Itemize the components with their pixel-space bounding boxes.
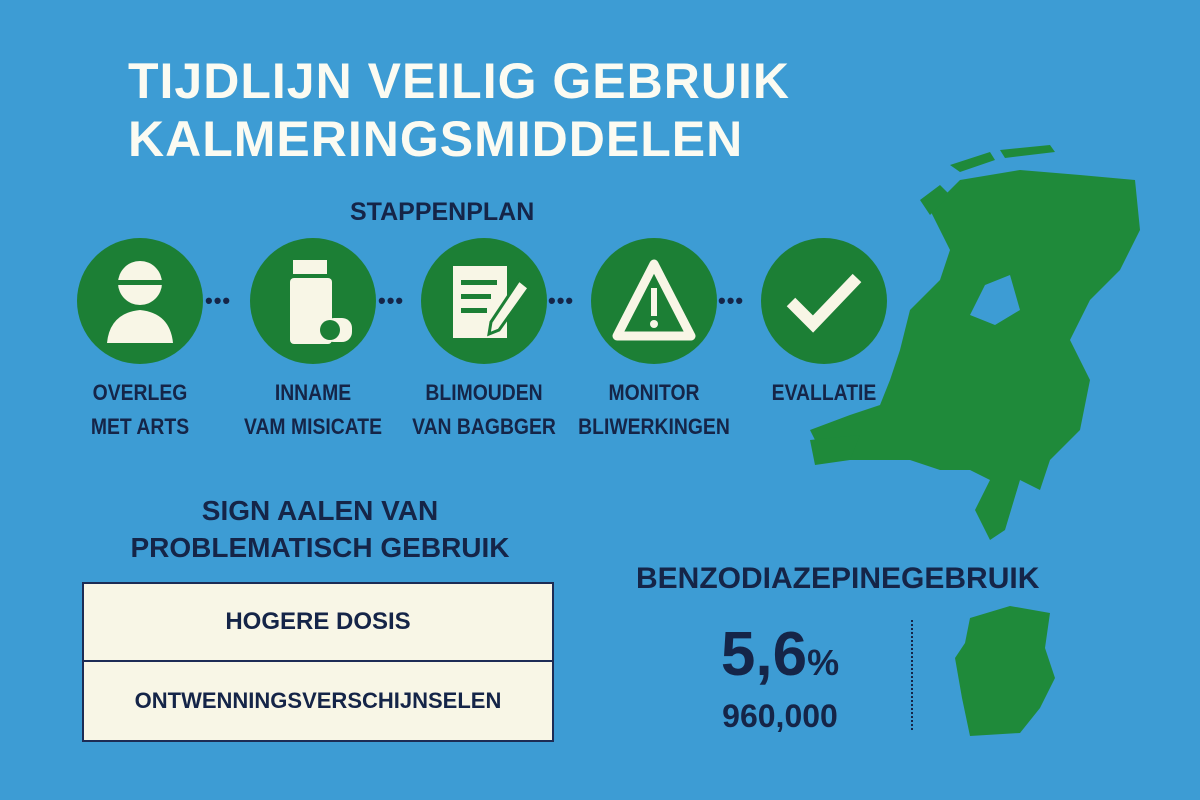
divider dotted	[911, 620, 913, 730]
steps: •••	[378, 288, 404, 313]
heading: signalen	[130, 495, 510, 563]
step 5 icon: check	[761, 238, 887, 364]
heading: benzodiazepinegebruik: BENZODIAZEPINEGEBRUIK	[636, 562, 1039, 595]
step 4 icon: warning	[591, 238, 717, 364]
heading: signalen: PROBLEMATISCH GEBRUIK	[130, 532, 510, 563]
title: TIJDLIJN VEILIG GEBRUIK	[128, 53, 790, 109]
box: hogere dosis	[82, 582, 554, 662]
stat	[721, 620, 839, 734]
title	[128, 53, 790, 167]
step 1 icon: doctor	[77, 238, 203, 364]
step 2 icon: medicine	[250, 238, 376, 364]
steps: BLIMOUDEN	[425, 380, 543, 405]
map: Netherlands	[810, 145, 1140, 540]
steps: BLIWERKINGEN	[578, 414, 730, 439]
heading: stappenplan: STAPPENPLAN	[350, 198, 534, 226]
step labels	[91, 380, 189, 439]
box: ontwenningsverschijnselen	[82, 662, 554, 742]
heading: signalen: SIGN AALEN VAN	[202, 495, 438, 526]
signal boxes	[82, 582, 554, 742]
steps	[77, 238, 887, 439]
steps: •••	[718, 288, 744, 313]
steps: VAN BAGBGER	[412, 414, 556, 439]
step 3 icon: document	[421, 238, 547, 364]
stat: 960,000	[722, 698, 838, 734]
steps: VAM MISICATE	[244, 414, 382, 439]
steps: MONITOR	[608, 380, 700, 405]
title: KALMERINGSMIDDELEN	[128, 111, 743, 167]
box: hogere dosis: HOGERE DOSIS	[225, 608, 411, 635]
small map	[955, 606, 1055, 736]
steps: INNAME	[275, 380, 351, 405]
box: ontwenningsverschijnselen: ONTWENNINGSVERSCHIJNSELEN	[135, 688, 501, 713]
step labels: OVERLEG	[93, 380, 187, 405]
stat: 5,6%	[721, 620, 839, 689]
steps: EVALLATIE	[772, 380, 876, 405]
steps: •••	[548, 288, 574, 313]
step labels: MET ARTS	[91, 414, 189, 439]
steps: •••	[205, 288, 231, 313]
